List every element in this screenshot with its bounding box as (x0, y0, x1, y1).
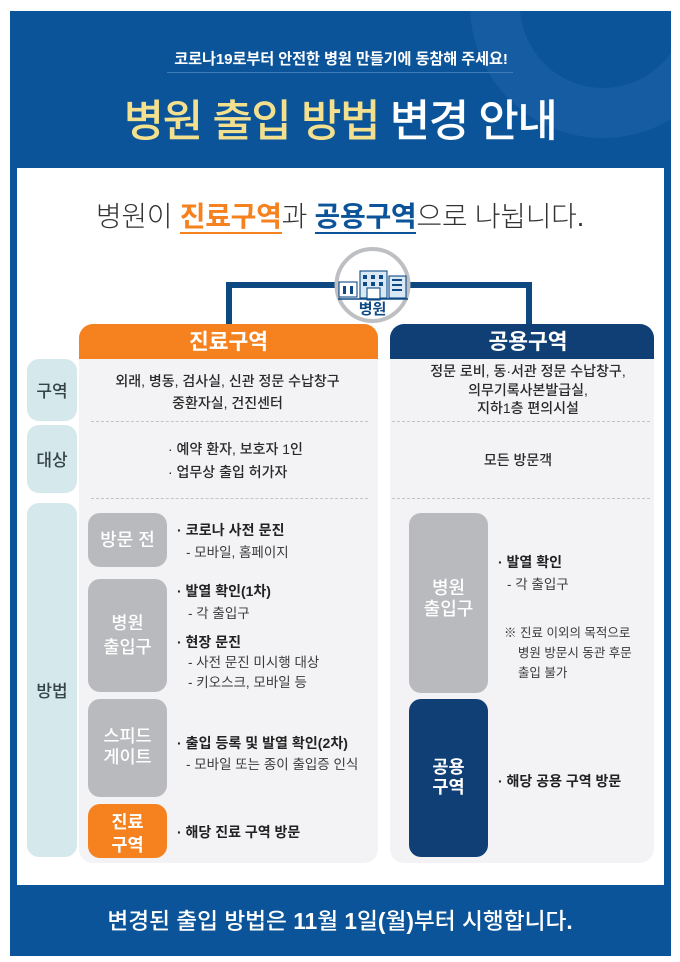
text: clinical zone places: 중환자실, 건진센터 (172, 395, 283, 411)
box: public zone (409, 699, 488, 857)
footer text: 변경된 출입 방법은 11월 1일(월)부터 시행합니다. (107, 908, 573, 934)
text: public zone places: 지하1층 편의시설 (477, 400, 579, 416)
box: hospital entrance: 병원 (111, 612, 144, 632)
text: clinical zone places: 외래, 병동, 검사실, 신관 정문 수납창구 (115, 373, 340, 389)
icon: hospital: 병원 (359, 301, 386, 318)
heading: 병원이 진료구역과 공용구역으로 나뉩니다. (96, 201, 584, 232)
white content panel (17, 168, 664, 885)
text: note: 출입 불가 (518, 666, 567, 680)
box: speed gate: 스피드 (103, 726, 152, 746)
row label: method (27, 503, 77, 857)
text: clinical zone places (115, 373, 340, 411)
row label: zone (27, 359, 77, 421)
box: public hospital entrance: 출입구 (424, 599, 473, 619)
box: public hospital entrance (409, 513, 488, 693)
box: speed gate: 게이트 (103, 747, 152, 767)
text: on-site detail (188, 655, 319, 690)
text: clinical target (168, 441, 303, 480)
row label: method: 방법 (36, 682, 68, 700)
box: clinical zone (88, 804, 167, 858)
text: public zone places (430, 363, 626, 416)
subtitle: 코로나19로부터 안전한 병원 만들기에 동참해 주세요! (174, 51, 508, 68)
text: entry registration detail: - 모바일 또는 종이 출입증 인식 (186, 757, 358, 772)
box: hospital entrance: 출입구 (103, 636, 152, 656)
text: fever check 1: · 발열 확인(1차) (177, 583, 271, 599)
text: before visit: · 코로나 사전 문진 (177, 522, 285, 538)
panel: clinical zone header (79, 324, 378, 359)
text: on-site questionnaire: · 현장 문진 (177, 634, 241, 650)
box: before visit (88, 513, 167, 567)
text: clinical target: · 예약 환자, 보호자 1인 (168, 441, 303, 457)
panel: public zone header (390, 324, 654, 359)
connector lines (226, 282, 532, 326)
panel: public zone header: 공용구역 (488, 330, 568, 354)
subtitle underline (167, 72, 513, 73)
text: on-site detail: - 키오스크, 모바일 등 (188, 675, 307, 690)
text: before visit detail: - 모바일, 홈페이지 (186, 545, 289, 560)
box: speed gate (88, 699, 167, 797)
box: clinical zone: 구역 (111, 834, 144, 854)
panel: public zone (390, 324, 654, 863)
text: note: ※ 진료 이외의 목적으로 (504, 626, 630, 640)
text: on-site detail: - 사전 문진 미시행 대상 (188, 655, 319, 670)
text: visit clinical zone: · 해당 진료 구역 방문 (177, 824, 300, 840)
text: fever check: · 발열 확인 (498, 554, 562, 570)
text: public zone places: 정문 로비, 동·서관 정문 수납창구, (430, 363, 626, 379)
row label: zone: 구역 (36, 382, 68, 400)
box: before visit: 방문 전 (100, 530, 155, 550)
title: 병원 출입 방법 변경 안내 (124, 97, 556, 146)
box: hospital entrance (88, 579, 167, 692)
panel: clinical zone header: 진료구역 (189, 330, 268, 354)
icon: hospital (334, 247, 410, 323)
row label: target: 대상 (36, 450, 68, 470)
text: public target: 모든 방문객 (484, 452, 552, 468)
text: note (504, 626, 632, 680)
text: public zone places: 의무기록사본발급실, (468, 382, 588, 398)
text: clinical target: · 업무상 출입 허가자 (168, 464, 287, 480)
box: public zone: 구역 (432, 777, 465, 797)
panel: clinical zone (79, 324, 378, 863)
text: visit public zone: · 해당 공용 구역 방문 (498, 773, 621, 789)
text: entry registration: · 출입 등록 및 발열 확인(2차) (177, 735, 348, 751)
box: public hospital entrance: 병원 (432, 578, 465, 598)
text: note: 병원 방문시 동관 후문 (518, 646, 632, 660)
box: clinical zone: 진료 (111, 812, 144, 832)
box: public zone: 공용 (432, 756, 465, 776)
text: fever check 1 detail: - 각 출입구 (188, 606, 250, 621)
text: fever check detail: - 각 출입구 (507, 577, 569, 592)
row label: target (27, 425, 77, 493)
